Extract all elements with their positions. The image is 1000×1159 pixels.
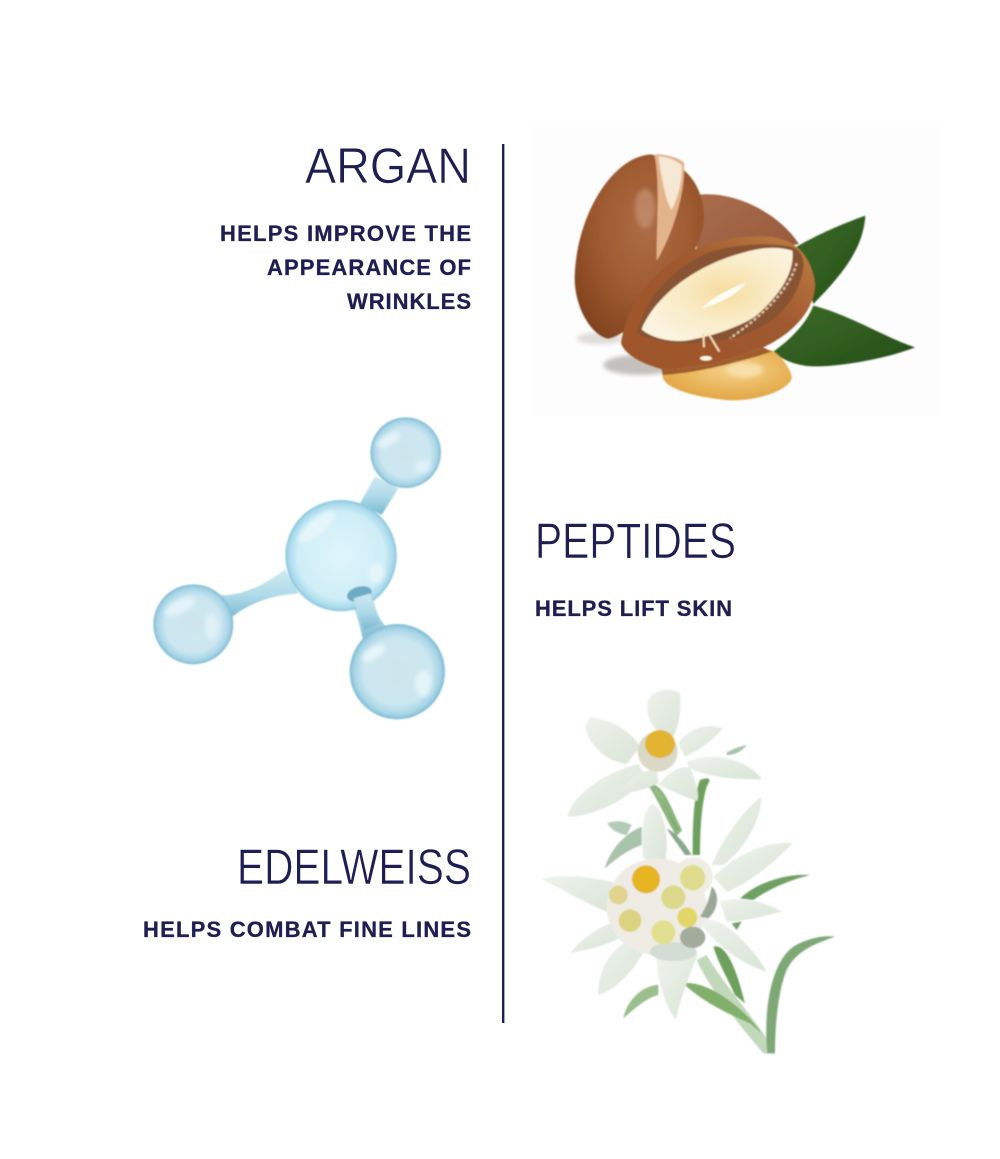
text block: edelweiss benefit: HELPS COMBAT FINE LINES	[143, 917, 471, 942]
image: molecule	[153, 417, 445, 719]
icon: whole nut	[575, 154, 704, 339]
icon: top sphere	[370, 417, 441, 488]
panel: peptides text	[535, 513, 736, 621]
image: edelweiss flower	[542, 690, 835, 1053]
icon: bottom sphere	[350, 624, 445, 719]
icon: upper leaf	[797, 216, 865, 304]
icon: back nut	[697, 194, 799, 260]
heading: peptides: PEPTIDES	[535, 513, 736, 569]
image: argan nuts	[533, 125, 938, 417]
icon: lower leaf	[773, 306, 915, 366]
heading: edelweiss: EDELWEISS	[237, 839, 471, 895]
icon: upper bloom centre	[638, 730, 678, 772]
divider line	[502, 144, 504, 1023]
icon: molecule bonds	[218, 477, 398, 642]
icon: centre sphere	[285, 500, 397, 611]
icon: lower bloom centre	[607, 857, 717, 961]
text block: argan benefit: APPEARANCE OF	[267, 255, 471, 280]
text block: argan benefit	[220, 221, 471, 314]
text block: argan benefit: WRINKLES	[347, 289, 471, 314]
panel: argan text	[220, 138, 471, 314]
icon: kernel	[642, 248, 793, 341]
icon: honey drop	[663, 350, 792, 400]
icon: cut nut shell	[621, 236, 815, 369]
icon: nut crack	[654, 154, 684, 261]
icon: lower bloom petals	[542, 797, 793, 1019]
icon: upper bloom	[567, 690, 762, 817]
icon: stems and leaves	[605, 745, 835, 1053]
text block: peptides benefit: HELPS LIFT SKIN	[535, 596, 732, 621]
text block: argan benefit: HELPS IMPROVE THE	[220, 221, 471, 246]
panel: edelweiss text	[143, 839, 471, 942]
heading: argan: ARGAN	[305, 138, 471, 194]
icon: left sphere	[153, 584, 233, 664]
